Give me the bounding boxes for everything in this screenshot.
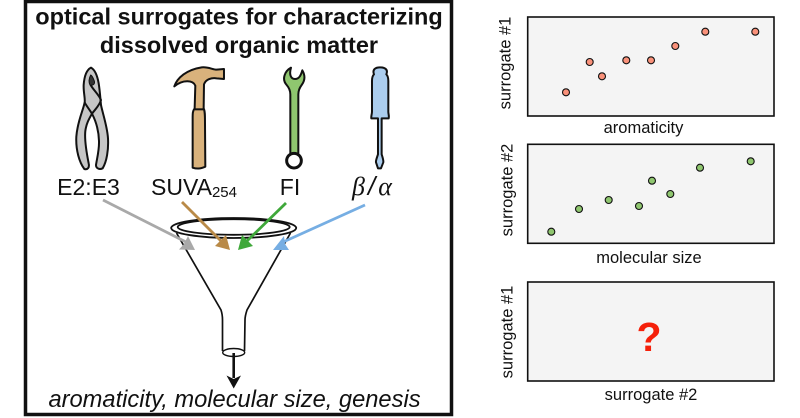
text: SUVA254: 254 [212,184,237,201]
title: dissolved organic matter [100,32,378,58]
title [35,4,443,58]
icon: screwdriver [371,67,389,168]
x axis label: molecular size [596,249,702,267]
question mark: ? [636,314,662,360]
icon: pliers [76,68,108,169]
x axis label: surrogate #2 [605,386,697,404]
y axis label: surrogate #2 [498,144,516,236]
panel: optical surrogates funnel diagram [26,2,452,414]
text: E2:E3: E2:E3 [57,174,120,200]
chart: surrogate 2 vs molecular size [498,144,774,267]
data points [562,28,759,96]
icon: hammer [174,67,224,169]
chart: surrogate 1 vs surrogate 2 [498,282,774,404]
y axis label: surrogate #1 [498,286,516,378]
x axis label: aromaticity [604,119,684,137]
y axis label: surrogate #1 [496,17,514,109]
title: optical surrogates for characterizing [35,4,443,30]
data points [548,158,754,235]
arrow: blue [273,205,365,250]
arrow: gray [103,200,195,250]
arrow: funnel output [226,353,241,388]
text: beta / alpha: β/α [351,171,393,201]
text: FI: FI [280,174,300,200]
text: SUVA254: SUVA [151,174,212,200]
icon: wrench [284,68,304,168]
arrow: brown [182,202,230,250]
text: outcomes: aromaticity, molecular size, genesis [48,387,421,413]
funnel [171,218,296,356]
chart: surrogate 1 vs aromaticity [496,17,774,137]
arrow: green [238,203,286,250]
